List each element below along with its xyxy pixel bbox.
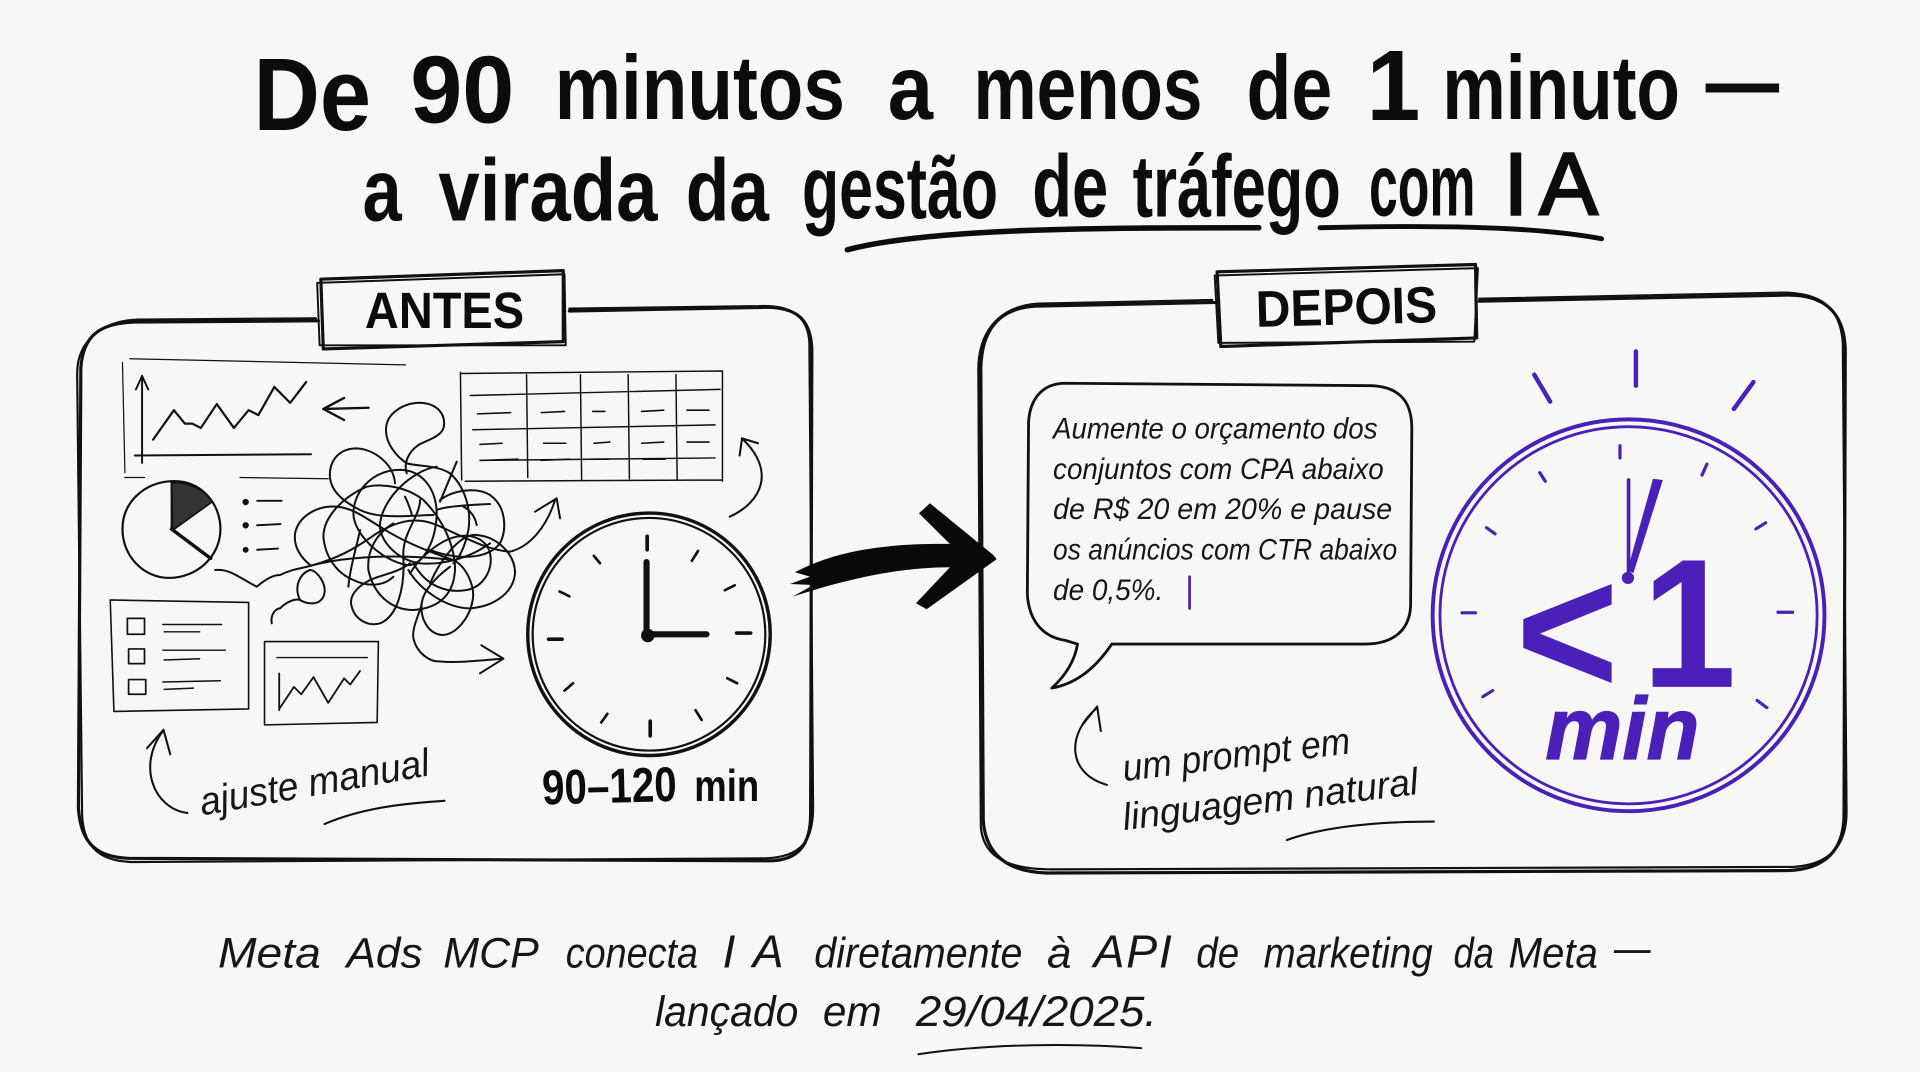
title: a [888, 38, 934, 139]
footer text: IA [722, 925, 784, 977]
speech bubble [1027, 383, 1412, 688]
arrow: ajuste manual [147, 730, 187, 813]
footer text: conecta [566, 929, 698, 977]
prompt text: Aumente o orçamento dos [1051, 412, 1378, 445]
footer text: à [1047, 929, 1071, 977]
footer text: MCP [443, 929, 539, 977]
title: 90 [410, 37, 514, 143]
title: de [1247, 38, 1332, 139]
pie chart [122, 481, 220, 578]
footer text: marketing [1264, 929, 1433, 977]
prompt text: de 0,5%. [1053, 574, 1163, 607]
panel: antes [77, 271, 813, 862]
chart: line sketch [122, 359, 405, 479]
footer text: API [1090, 925, 1172, 977]
checklist card [110, 600, 249, 711]
label: depois: DEPOIS [1255, 275, 1438, 338]
title: 1 [1367, 30, 1420, 142]
big value: min [1545, 679, 1700, 778]
big value: < [1516, 528, 1619, 733]
legend list [242, 499, 282, 553]
clock: depois [1433, 351, 1824, 811]
title: IA [1504, 134, 1598, 233]
footer text: Ads [343, 929, 422, 977]
big value: 1 [1642, 521, 1736, 726]
footer text: — [1613, 924, 1652, 972]
annotation: ajuste manual: ajuste manual [196, 741, 434, 824]
table sketch [460, 371, 722, 481]
big value [1516, 521, 1736, 778]
panel: depois [978, 264, 1847, 873]
footer text [218, 924, 1652, 1054]
tangled scribble [215, 403, 560, 673]
prompt text [1051, 412, 1397, 607]
footer text: em [823, 988, 882, 1036]
cursor [1188, 577, 1191, 609]
annotation: prompt: linguagem natural [1120, 761, 1422, 839]
footer text: de [1196, 929, 1239, 977]
clock rays [1534, 351, 1753, 409]
title: de [1032, 137, 1108, 236]
prompt text: conjuntos com CPA abaixo [1053, 453, 1384, 486]
label: antes [317, 271, 566, 349]
title: a [362, 140, 402, 239]
arrow: curve to table [730, 438, 762, 517]
arrow: tangle to chart [323, 398, 369, 420]
prompt text: de R$ 20 em 20% e pause [1053, 493, 1392, 526]
footer text: 29/04/2025. [915, 988, 1157, 1036]
footer text: diretamente [814, 929, 1022, 977]
title: minuto [1442, 38, 1680, 139]
title: De [253, 37, 371, 152]
title [253, 30, 1779, 250]
time label: 90-120 min: min [694, 762, 759, 811]
arrow: antes to depois [790, 503, 997, 609]
footer text: da [1453, 929, 1494, 977]
time label: 90-120 min: 90–120 [541, 758, 677, 815]
title: gestão [802, 138, 998, 237]
small chart card [265, 642, 378, 725]
title: com [1369, 136, 1475, 235]
clock: antes [528, 513, 770, 755]
title: menos [973, 38, 1202, 139]
prompt text: os anúncios com CTR abaixo [1053, 534, 1397, 567]
annotation: prompt [1120, 721, 1434, 840]
title: tráfego [1133, 137, 1341, 236]
footer text: Meta [1509, 929, 1598, 977]
arrow: prompt [1075, 707, 1107, 785]
clock hands [1627, 480, 1630, 572]
title: da [686, 140, 770, 239]
annotation: prompt: um prompt em [1120, 721, 1352, 790]
label: depois [1215, 264, 1478, 347]
title: — [1706, 32, 1779, 133]
label: antes: ANTES [365, 281, 524, 339]
footer text: lançado [655, 988, 798, 1036]
title: virada [438, 140, 658, 239]
footer text: Meta [218, 929, 321, 977]
title: minutos [555, 38, 845, 139]
